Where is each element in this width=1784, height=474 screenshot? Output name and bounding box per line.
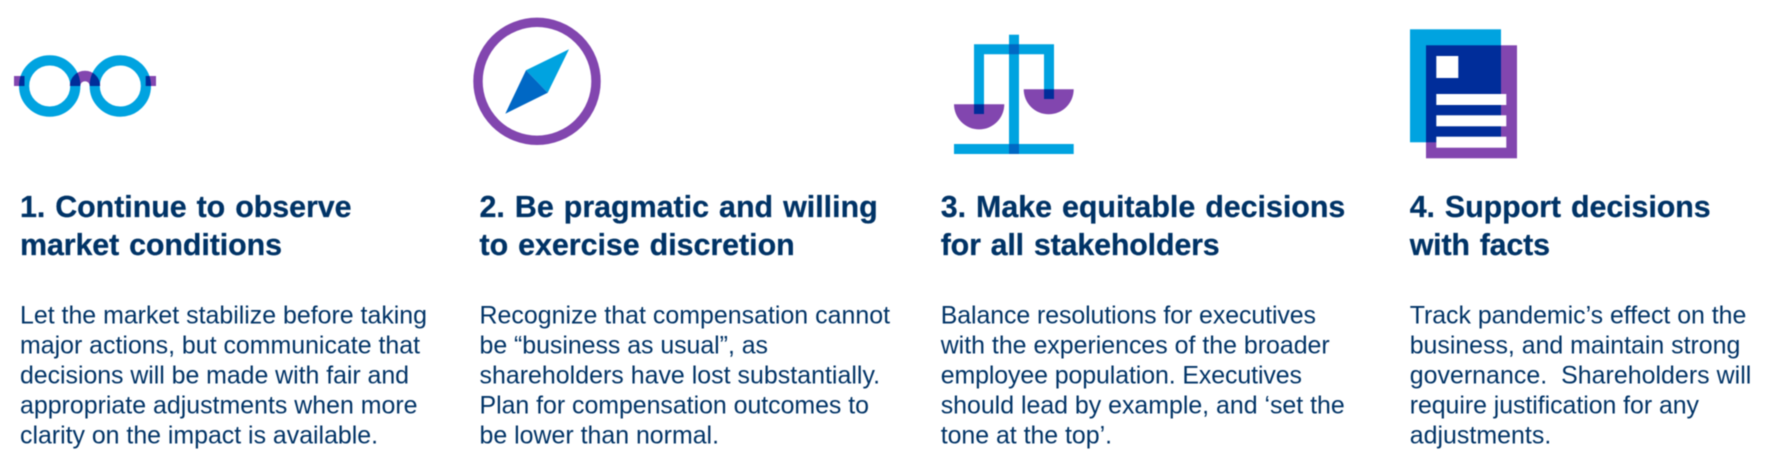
panel: observe market conditions [14, 60, 427, 450]
body text 2: be “business as usual”, as [480, 332, 768, 360]
body text 2: shareholders have lost substantially. [480, 362, 880, 390]
body text 3: tone at the top’. [941, 422, 1112, 450]
heading 4: 4. Support decisions [1410, 190, 1711, 224]
heading 1: market conditions [20, 228, 282, 262]
body text 2: Recognize that compensation cannot [480, 302, 890, 330]
body text 1: appropriate adjustments when more [20, 392, 418, 420]
body text 3: employee population. Executives [941, 362, 1302, 390]
body text 1: clarity on the impact is available. [20, 422, 378, 450]
body text 4: Track pandemic’s effect on the [1410, 302, 1746, 330]
icon: glasses [14, 60, 156, 112]
heading 2: to exercise discretion [480, 228, 795, 262]
body text 3: Balance resolutions for executives [941, 302, 1316, 330]
body text 1: decisions will be made with fair and [20, 362, 409, 390]
panel: support with facts [1409, 29, 1751, 450]
body text 2: be lower than normal. [480, 422, 719, 450]
panel: pragmatic and willing [478, 22, 890, 450]
body text 4: governance. Shareholders will [1410, 362, 1751, 390]
body text 3: with the experiences of the broader [940, 332, 1330, 360]
body text 4: business, and maintain strong [1410, 332, 1740, 360]
body text 1: major actions, but communicate that [20, 332, 420, 360]
body text 2: Plan for compensation outcomes to [480, 392, 869, 420]
body text 3: should lead by example, and ‘set the [941, 392, 1345, 420]
heading 3: 3. Make equitable decisions [941, 190, 1345, 224]
heading 4: with facts [1409, 228, 1550, 262]
body text 4: adjustments. [1410, 422, 1551, 450]
heading 1: 1. Continue to observe [20, 190, 352, 224]
panel: equitable decisions [940, 35, 1345, 449]
icon: document [1410, 29, 1517, 158]
heading 2: 2. Be pragmatic and willing [480, 190, 878, 224]
icon: compass [478, 22, 596, 140]
body text 4: require justification for any [1410, 392, 1700, 420]
body text 1: Let the market stabilize before taking [20, 302, 427, 330]
icon: balance scales [954, 35, 1074, 154]
heading 3: for all stakeholders [941, 228, 1220, 262]
